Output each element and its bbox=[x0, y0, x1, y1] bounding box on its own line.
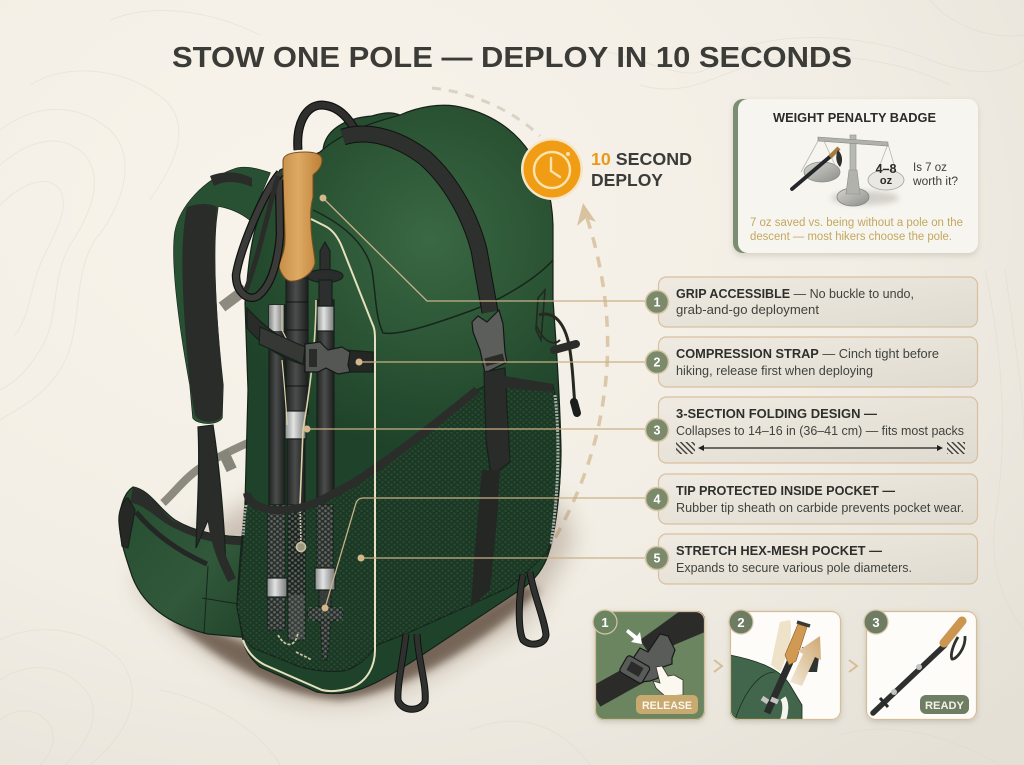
ready label: READY bbox=[925, 700, 965, 712]
shoulder strap bbox=[174, 167, 270, 580]
title: STOW ONE POLE — DEPLOY IN 10 SECONDS bbox=[172, 42, 852, 74]
pocket binding band bbox=[247, 390, 477, 510]
main top strap and buckle bbox=[343, 134, 507, 373]
cork grip bbox=[279, 152, 322, 281]
callout 3: folding design bbox=[646, 397, 978, 463]
pack body bbox=[237, 105, 561, 693]
badge note bbox=[750, 217, 963, 243]
bottom loops bbox=[398, 572, 546, 709]
pole wrist strap bbox=[236, 173, 280, 298]
callout 5: hex-mesh pocket bbox=[646, 534, 978, 584]
poles: upper sections bbox=[269, 242, 343, 509]
icon: white arrow bbox=[626, 629, 642, 644]
icon: balance scale: oz bbox=[880, 175, 893, 187]
callout 1: grip accessible: 1 bbox=[654, 296, 661, 310]
icon: balance scale bbox=[792, 135, 904, 206]
step 1: release buckle: 1 bbox=[601, 615, 609, 630]
icon: balance scale: 4–8 bbox=[876, 162, 896, 176]
callout 1: grip accessible bbox=[646, 277, 978, 327]
callout 3: folding design: Collapses to 14–16 in (36–41 cm) — fits most packs bbox=[676, 424, 964, 438]
stretch hex-mesh pocket bbox=[237, 377, 561, 671]
ground shadow bbox=[135, 500, 575, 703]
lower vertical strap bbox=[471, 368, 553, 607]
callout 2: compression strap: 2 bbox=[654, 356, 661, 370]
scale question: Is 7 oz bbox=[913, 162, 947, 174]
step 2: pull pole bbox=[729, 610, 841, 722]
step 3: ready pole: 3 bbox=[872, 615, 880, 630]
callout 2: compression strap: hiking, release first when deploying bbox=[676, 364, 873, 378]
step 1: release buckle bbox=[593, 610, 705, 722]
ferrules and leash through mesh bbox=[267, 505, 335, 660]
callout 5: hex-mesh pocket: STRETCH HEX-MESH POCKET — bbox=[676, 544, 883, 558]
backpack illustration bbox=[119, 105, 577, 709]
dimension arrow bbox=[676, 442, 965, 454]
panel: weight penalty badge bbox=[733, 99, 978, 256]
icon: trekking pole bbox=[873, 621, 965, 713]
callout 2: compression strap: COMPRESSION STRAP — Cinch tight before bbox=[676, 347, 939, 361]
release label: RELEASE bbox=[642, 700, 692, 712]
badge note: 7 oz saved vs. being without a pole on the bbox=[750, 217, 963, 229]
chevron bbox=[849, 660, 857, 672]
timer label: DEPLOY bbox=[591, 170, 663, 190]
grey webbing straps bbox=[163, 289, 250, 503]
side cord and cord lock bbox=[536, 290, 577, 413]
scale question: worth it? bbox=[912, 176, 958, 188]
badge note: descent — most hikers choose the pole. bbox=[750, 231, 952, 243]
step 3: ready pole bbox=[864, 610, 977, 722]
cream piping bbox=[243, 219, 375, 691]
callout 4: tip protected: 4 bbox=[654, 492, 661, 506]
callout 2: compression strap bbox=[646, 337, 978, 387]
callout 1: grip accessible: grab-and-go deployment bbox=[676, 303, 820, 317]
icon: timer bbox=[521, 138, 583, 200]
badge heading: WEIGHT PENALTY BADGE bbox=[773, 111, 936, 125]
callout 5: hex-mesh pocket: Expands to secure various pole diameters. bbox=[676, 561, 912, 575]
callout 4: tip protected: TIP PROTECTED INSIDE POCKET — bbox=[676, 484, 895, 498]
callout 5: hex-mesh pocket: 5 bbox=[654, 552, 661, 566]
compression strap and buckle bbox=[247, 308, 373, 374]
step 2: pull pole: 2 bbox=[737, 615, 745, 630]
dashed deploy arc arrow bbox=[432, 88, 608, 590]
hip belt bbox=[119, 487, 250, 638]
callout 1: grip accessible: GRIP ACCESSIBLE — No buckle to undo, bbox=[676, 287, 914, 301]
timer label: 10 SECOND bbox=[591, 149, 692, 169]
top haul loop and back panel bbox=[298, 105, 405, 160]
callout 4: tip protected bbox=[646, 474, 978, 524]
poles lower sections seen through mesh bbox=[268, 505, 343, 660]
callout 4: tip protected: Rubber tip sheath on carbide prevents pocket wear. bbox=[676, 501, 964, 515]
icon: pointing hand bbox=[653, 666, 683, 696]
lid seam bbox=[313, 210, 553, 333]
timer label bbox=[591, 149, 692, 190]
chevron bbox=[714, 660, 722, 672]
callout 3: folding design: 3 bbox=[654, 424, 661, 438]
scale question bbox=[912, 162, 958, 188]
leader lines bbox=[304, 194, 646, 612]
callout 3: folding design: 3-SECTION FOLDING DESIGN — bbox=[676, 407, 878, 421]
